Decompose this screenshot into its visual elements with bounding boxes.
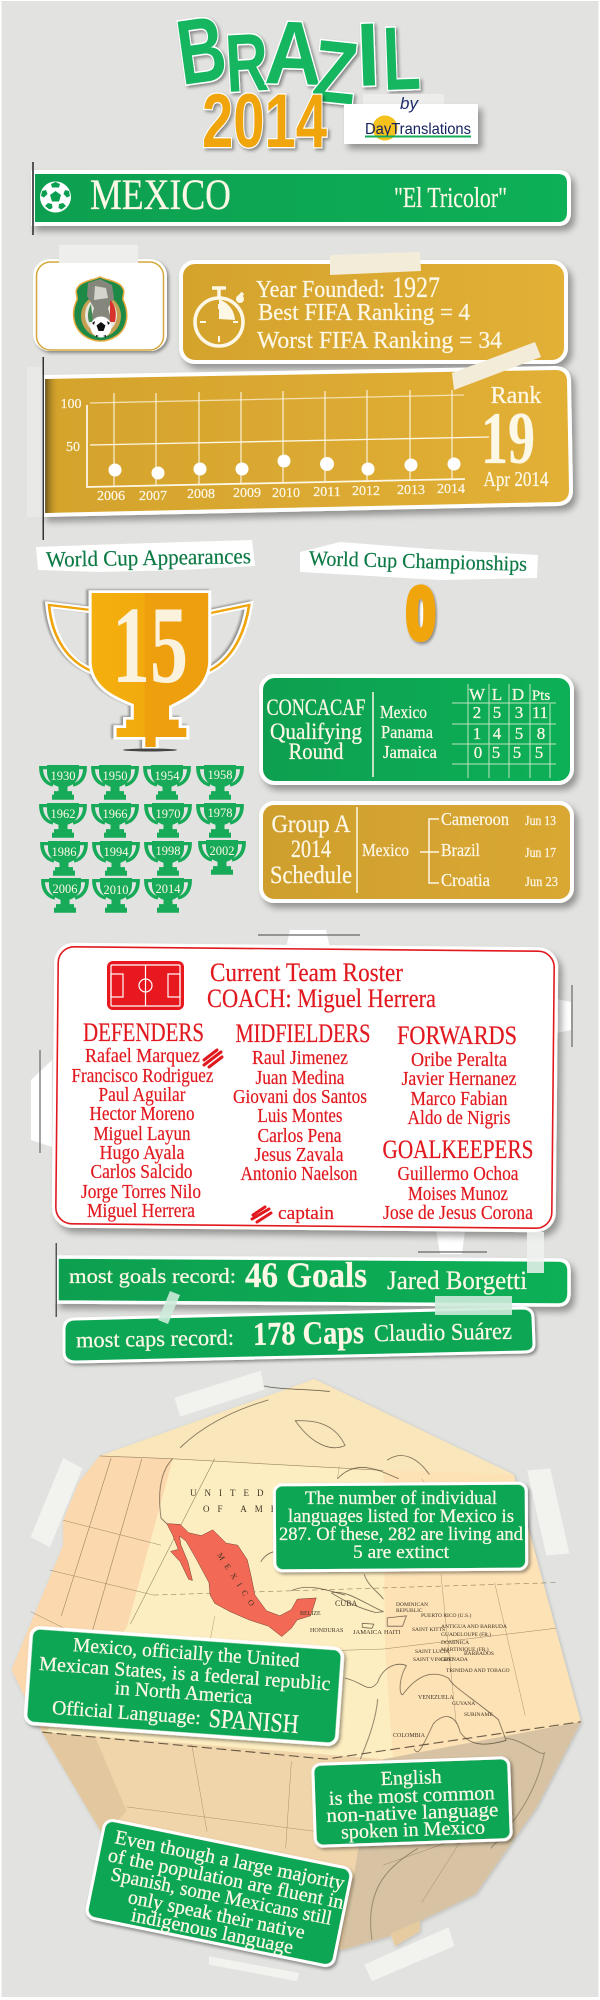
- trophy grid: appearance years: 1970: [156, 807, 180, 821]
- panel: federation crest: [33, 245, 167, 351]
- trophy grid: appearance years: 2006: [52, 882, 78, 896]
- panel: Group A schedule: [261, 803, 572, 901]
- text: panel title: [270, 811, 352, 889]
- column: goalkeepers: Guillermo Ochoa: [398, 1163, 519, 1185]
- table: standings: Panama: [381, 722, 433, 742]
- label: World Cup Championships: World Cup Championships: [309, 546, 527, 576]
- rank callout: 19 April 2014: Apr 2014: [484, 467, 549, 491]
- trophy grid: appearance years: 1950: [102, 769, 128, 783]
- callout: English non-native language: non-native language: [326, 1799, 499, 1827]
- tape strips: [31, 1371, 569, 1981]
- title year: 2014: 2014: [202, 79, 327, 164]
- column: midfielders: Raul Jimenez: [252, 1047, 348, 1069]
- map labels: HONDURAS: [310, 1628, 343, 1634]
- icon: Mexico crest: [74, 277, 127, 341]
- title word: BRAZIL: A: [263, 1, 324, 104]
- callout: federal republic and official language: in North America: [114, 1677, 253, 1709]
- tabs and facets: [100, 1379, 514, 1475]
- table: standings: 3: [515, 703, 523, 722]
- trophy grid: appearance years: 1930: [50, 769, 76, 783]
- trophy grid: appearance years: 2002: [210, 844, 234, 858]
- map: paper globe centred on Mexico: [12, 1371, 581, 1981]
- column: defenders: Francisco Rodriguez: [72, 1065, 214, 1087]
- callout: number of languages: 5 are extinct: [353, 1542, 450, 1563]
- column: defenders: DEFENDERS: [83, 1018, 204, 1047]
- map labels: DOMINICA: [441, 1640, 469, 1646]
- text: panel title: Group A: [272, 811, 350, 838]
- column: forwards: [397, 1021, 517, 1129]
- column: goalkeepers: Moises Munoz: [408, 1183, 508, 1205]
- logo card: by DayTranslations: DayTranslations: [365, 121, 471, 138]
- callout: number of languages: languages listed for Mexico is: [288, 1506, 514, 1527]
- icon: soccer ball: [40, 182, 71, 212]
- text: panel title: Qualifying: [270, 719, 362, 744]
- bracket: opponents and dates: Brazil: [441, 840, 480, 860]
- map labels: GUADELOUPE (FR.): [441, 1631, 491, 1638]
- championships count: 0: 0: [406, 575, 435, 654]
- text: panel title: CONCACAF: [266, 695, 366, 720]
- column: midfielders: [233, 1019, 370, 1185]
- column: midfielders: Antonio Naelson: [240, 1163, 358, 1185]
- title word: BRAZIL: L: [381, 8, 422, 110]
- title word: BRAZIL: I: [355, 4, 381, 106]
- bracket: opponents and dates: Jun 13: [525, 814, 556, 829]
- banner: most caps record: [64, 1308, 534, 1362]
- panel: current team roster: [31, 930, 572, 1254]
- Mexico highlighted: [167, 1524, 316, 1637]
- map labels: TRINIDAD AND TOBAGO: [446, 1668, 510, 1674]
- title word: BRAZIL: [170, 0, 422, 124]
- map labels: MARTINIQUE (FR.): [441, 1646, 489, 1653]
- banner: most goals record: 46 Goals: [245, 1255, 367, 1295]
- title: Brazil 2014: [170, 0, 422, 164]
- table: standings: 8: [537, 724, 545, 743]
- column: midfielders: MIDFIELDERS: [236, 1019, 370, 1048]
- column: forwards: Javier Hernanez: [402, 1068, 517, 1090]
- callout: federal republic and official language: SPANISH: [208, 1703, 300, 1739]
- text: panel title: 2014: [291, 836, 331, 863]
- column: defenders: [72, 1018, 214, 1222]
- trophy grid: appearance years: 2010: [104, 883, 128, 897]
- map labels: SURINAME: [464, 1712, 493, 1718]
- chart: rank by year: 2014: [437, 482, 465, 497]
- map labels: [190, 1488, 510, 1739]
- chart: rank by year: 2006: [97, 489, 125, 504]
- text: best ranking: Best FIFA Ranking = 4: [258, 300, 470, 326]
- callout: indigenous languages: indigenous language: [129, 1904, 295, 1959]
- callout: federal republic and official language: Mexico, officially the United: [72, 1634, 300, 1672]
- trophy grid: appearance years: 1998: [156, 844, 180, 858]
- legend: captain: captain: [278, 1203, 335, 1224]
- column: midfielders: Carlos Pena: [258, 1125, 342, 1147]
- callout: indigenous languages: [86, 1819, 352, 1967]
- chart: rank by year: 2010: [272, 486, 300, 501]
- roster title: [207, 958, 436, 1013]
- callout: indigenous languages: Even though a large majority: [113, 1826, 347, 1895]
- column: midfielders: Giovani dos Santos: [233, 1086, 367, 1108]
- banner: most caps record: most caps record:: [76, 1325, 234, 1352]
- banner: most goals record: Jared Borgetti: [387, 1266, 527, 1295]
- rank callout: 19 April 2014: 19: [481, 398, 535, 480]
- banner text: nickname: "El Tricolor": [394, 182, 507, 214]
- table: standings: 2: [473, 703, 481, 722]
- column: forwards: Oribe Peralta: [411, 1049, 507, 1071]
- chart: rank by year: 100: [60, 397, 82, 412]
- map labels: VENEZUELA: [418, 1695, 454, 1701]
- text: year founded: 1927: [392, 271, 440, 304]
- trophy grid: appearance years: 1994: [104, 845, 129, 859]
- column: goalkeepers: Jose de Jesus Corona: [383, 1202, 533, 1224]
- chart: rank by year: 2008: [187, 487, 215, 502]
- callout: English non-native language: is the most common: [328, 1782, 495, 1810]
- table: standings: 5: [535, 743, 543, 762]
- trophy grid: appearance years: 2014: [156, 882, 181, 896]
- chart: rank by year: 2009: [233, 486, 261, 501]
- banner: most caps record: Claudio Suárez: [374, 1319, 512, 1347]
- roster title: Current Team Roster: [210, 958, 403, 987]
- map labels: GRENADA: [441, 1657, 468, 1663]
- bracket: opponents and dates: Jun 23: [525, 875, 558, 890]
- trophy grid: appearance years: 1962: [50, 807, 76, 821]
- table: standings: 5: [515, 724, 523, 743]
- table: standings: Mexico: [380, 702, 427, 722]
- roster title: COACH: Miguel Herrera: [207, 984, 436, 1013]
- panel: founded and FIFA ranking: [181, 252, 566, 362]
- table: standings: D: [512, 685, 524, 704]
- map labels: HAITI: [384, 1630, 400, 1636]
- trophy: 15 appearances: [49, 584, 249, 752]
- trophy grid: appearance years: 1986: [52, 845, 76, 859]
- map labels: GUYANA: [452, 1701, 475, 1707]
- column: forwards: Aldo de Nigris: [408, 1107, 511, 1129]
- callout: indigenous languages: only speak their native: [126, 1886, 307, 1944]
- chart: rank by year: [60, 390, 489, 504]
- text: panel title: [266, 695, 366, 764]
- panel: FIFA rank chart: [27, 342, 571, 540]
- map labels: SAINT VINCENT: [413, 1657, 455, 1663]
- text: panel title: Schedule: [270, 862, 352, 889]
- column: forwards: FORWARDS: [397, 1021, 517, 1050]
- bracket: opponents and dates: Croatia: [441, 870, 490, 890]
- table: standings: 1: [473, 724, 481, 743]
- column: forwards: Marco Fabian: [410, 1088, 508, 1110]
- title word: BRAZIL: R: [223, 16, 271, 110]
- callout: federal republic and official language: Mexican States, is a federal republic: [38, 1653, 331, 1695]
- banner: most goals record: most goals record:: [69, 1264, 236, 1288]
- bracket: opponents and dates: [362, 809, 558, 890]
- table: standings: L: [492, 685, 502, 704]
- map labels: BARBADOS: [464, 1651, 494, 1657]
- column: goalkeepers: [382, 1135, 534, 1224]
- trophy grid: appearance years: 1978: [208, 806, 232, 820]
- trophy: 15 appearances: 15: [112, 584, 188, 706]
- map labels: CUBA: [335, 1599, 357, 1608]
- callout: indigenous languages: of the population are fluent in: [106, 1844, 346, 1914]
- map labels: DOMINICAN: [396, 1602, 428, 1608]
- column: defenders: Hugo Ayala: [100, 1142, 185, 1164]
- chart: rank by year: 2013: [397, 483, 425, 498]
- trophy grid: appearance years: 1958: [208, 768, 232, 782]
- title word: BRAZIL: Z: [308, 22, 362, 124]
- table: standings: 11: [532, 703, 548, 722]
- table: standings: Jamaica: [383, 742, 437, 762]
- trophy grid: appearance years: 1966: [102, 807, 128, 821]
- map labels: SAINT LUCIA: [415, 1649, 449, 1655]
- callout: indigenous languages: Spanish, some Mexicans still: [109, 1863, 334, 1930]
- chart: rank by year: 2007: [139, 489, 167, 504]
- table: standings: 5: [492, 743, 500, 762]
- column: defenders: Paul Aguilar: [98, 1084, 186, 1106]
- table: standings: W: [469, 685, 486, 704]
- map labels: SAINT KITTS: [412, 1627, 445, 1633]
- map lines: [31, 1456, 556, 1902]
- map labels: ANTIGUA AND BARBUDA: [441, 1624, 507, 1630]
- column: defenders: Miguel Layun: [94, 1123, 190, 1145]
- logo card: by DayTranslations: by: [400, 94, 419, 113]
- callout: number of languages: 287. Of these, 282 are living and: [279, 1524, 523, 1545]
- bracket: opponents and dates: Cameroon: [441, 809, 509, 829]
- map labels: BELIZE: [300, 1611, 321, 1617]
- legend: captain: [252, 1203, 335, 1224]
- map labels: COLOMBIA: [393, 1733, 426, 1739]
- icon: stopwatch: [195, 288, 244, 346]
- map labels: PUERTO RICO (U.S.): [421, 1612, 471, 1619]
- banner: most goals record: [56, 1243, 569, 1317]
- callout: number of languages: [274, 1483, 527, 1571]
- chart: rank by year: 50: [66, 440, 80, 455]
- text: panel title: Round: [288, 739, 344, 764]
- callout: number of languages: The number of individual: [305, 1488, 497, 1509]
- map labels: MEXICO: [215, 1551, 260, 1613]
- logo card: by DayTranslations: [344, 94, 478, 144]
- label: World Cup Appearances: World Cup Appearances: [46, 543, 251, 572]
- callout: English non-native language: spoken in Mexico: [341, 1816, 485, 1843]
- column: defenders: Jorge Torres Nilo: [81, 1181, 201, 1203]
- column: defenders: Carlos Salcido: [90, 1161, 192, 1183]
- rank callout: 19 April 2014: Rank: [491, 383, 541, 409]
- icon: captain mark on Rafael Marquez: [204, 1050, 222, 1067]
- trophy grid: appearance years: 1954: [154, 769, 180, 783]
- chart: rank by year: 2011: [313, 485, 341, 500]
- table: standings: 5: [493, 703, 501, 722]
- table: standings: [380, 684, 556, 778]
- table: standings: 0: [474, 743, 482, 762]
- map labels: UNITED S: [190, 1488, 295, 1498]
- text: worst ranking: Worst FIFA Ranking = 34: [257, 328, 502, 354]
- column: midfielders: Jesus Zavala: [254, 1144, 344, 1166]
- text: year founded: [256, 271, 440, 304]
- trophy grid: appearance years: [41, 765, 244, 913]
- banner text: MEXICO: MEXICO: [90, 172, 231, 219]
- table: standings: Pts: [532, 688, 550, 704]
- table: standings: 4: [493, 724, 502, 743]
- bracket: opponents and dates: Mexico: [362, 840, 409, 860]
- map labels: REPUBLIC: [396, 1608, 423, 1614]
- column: midfielders: Luis Montes: [258, 1105, 343, 1127]
- map labels: JAMAICA: [353, 1629, 382, 1636]
- callout: federal republic and official language: [25, 1627, 343, 1745]
- banner: most caps record: 178 Caps: [253, 1315, 364, 1353]
- column: goalkeepers: GOALKEEPERS: [382, 1135, 534, 1164]
- map labels: OF AME: [203, 1504, 284, 1514]
- text: year founded: Year Founded:: [256, 277, 385, 303]
- callout: federal republic and official language: Official Language:: [51, 1697, 202, 1729]
- table: standings: 5: [513, 743, 521, 762]
- callout: English non-native language: [313, 1758, 511, 1846]
- column: defenders: Hector Moreno: [90, 1103, 194, 1125]
- column: defenders: Miguel Herrera: [87, 1200, 195, 1222]
- bracket: opponents and dates: Jun 17: [525, 846, 556, 861]
- panel: CONCACAF qualifying round: [261, 676, 572, 783]
- chart: rank by year: 2012: [352, 484, 380, 499]
- column: midfielders: Juan Medina: [256, 1067, 345, 1089]
- column: defenders: Rafael Marquez: [85, 1045, 200, 1067]
- callout: English non-native language: English: [380, 1766, 442, 1790]
- icon: football pitch: [107, 961, 184, 1010]
- heading banner: Mexico: [32, 162, 569, 235]
